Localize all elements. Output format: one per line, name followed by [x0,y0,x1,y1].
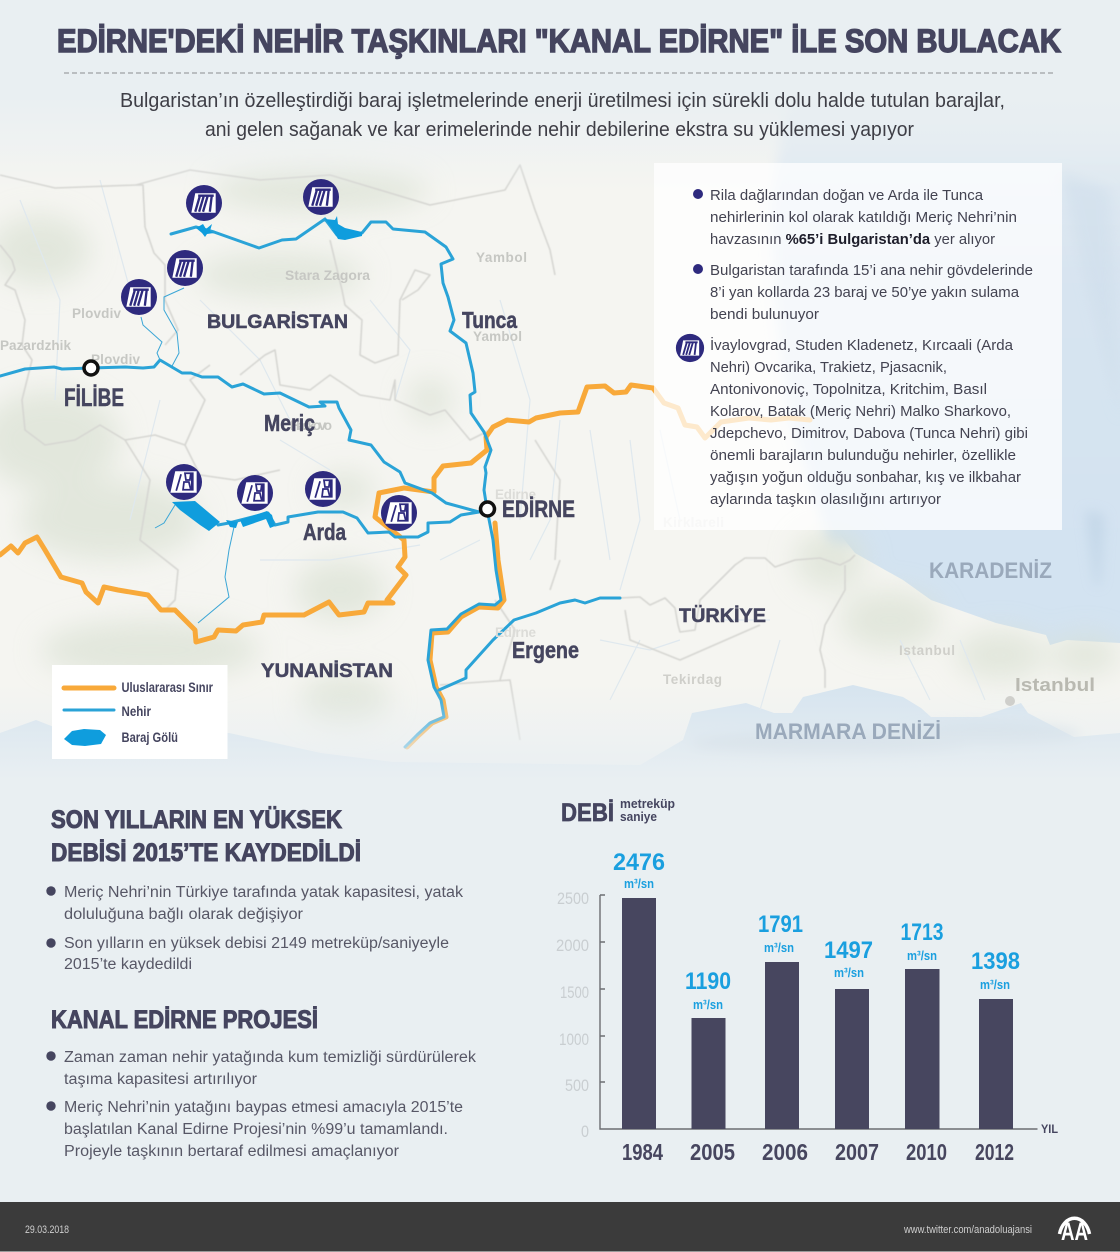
values: 1497 [824,937,873,964]
base map place names: Plovdiv [91,352,140,367]
heading: en yüksek debi [51,805,361,867]
map labels: Meriç [264,410,315,436]
axes [600,895,1038,1129]
legend: dam lake: Baraj Gölü [122,729,178,745]
values: 1190 [685,968,731,995]
icon: dam legend [676,334,704,362]
logo: AA: AA [1061,1218,1088,1246]
bullet 1: havzasının %65’i Bulgaristan’da yer alıyor [710,231,995,248]
values [613,849,1020,995]
text block: en yüksek debi: doluluğuna bağlı olarak değişiyor [64,906,303,923]
text block: Kanal Edirne: Projeyle taşkının bertaraf edilmesi amaçlanıyor [64,1143,399,1160]
legend: river: Nehir [122,703,151,719]
heading: en yüksek debi: DEBİSİ 2015’TE KAYDEDİLDİ [51,839,361,867]
sea: Karadeniz coast [835,528,1120,645]
text block: Kanal Edirne: başlatılan Kanal Edirne Projesi’nin %99’u tamamlandı. [64,1121,448,1138]
text block: Kanal Edirne: Zaman zaman nehir yatağında kum temizliği sürdürülerek [64,1049,476,1066]
map labels: FİLİBE [64,384,124,412]
base map place names: Edirne [495,487,536,502]
heading: en yüksek debi: SON YILLARIN EN YÜKSEK [51,805,342,834]
fade bottom [0,685,1120,790]
y axis labels: 500 [565,1076,589,1095]
years: 2012 [975,1139,1014,1165]
subtitle: ani gelen sağanak ve kar erimelerinde nehir debilerine ekstra su yüklemesi yapıyor [205,119,914,141]
fade top [0,0,1120,190]
river: Meriç [0,360,501,747]
subtitle: Bulgaristan’ın özelleştirdiği baraj işletmelerinde enerji üretilmesi için sürekli dolu halde tutulan barajlar, [120,90,1005,112]
text block: Kanal Edirne: Meriç Nehri’nin yatağını baypas etmesi amacıyla 2015’te [64,1099,463,1116]
dam lakes [172,216,362,531]
units [624,876,1010,1012]
twitter address: www.twitter.com/anadoluajansi [903,1224,1032,1236]
base map place names: Haskovo [290,418,332,433]
dam list: Antonivonoviç, Topolnitza, Kritchim, Basıl [710,381,987,398]
map labels: Tunca [462,307,517,333]
marker: Filibe [84,361,98,375]
panel: info box [654,163,1062,530]
text block: en yüksek debi: Meriç Nehri’nin Türkiye tarafında yatak kapasitesi, yatak [64,884,463,901]
terrain patches [0,168,1120,725]
values: 2476 [613,849,665,876]
light streams [20,180,985,710]
divider dashed line [64,72,1054,74]
units: m³/sn [834,965,864,980]
units: m³/sn [624,876,654,891]
map labels: Arda [303,519,346,545]
river: Tributaries [141,288,234,623]
legend: international border: Uluslararası Sınır [122,679,213,695]
marker: Edirne [480,502,494,516]
x axis label: YIL [1041,1122,1058,1136]
legend: river [64,703,151,719]
units: m³/sn [980,977,1010,992]
bullet 1: nehirlerinin kol olarak katıldığı Meriç Nehri’nin [710,209,1017,226]
heading: DEBİ: metreküp [620,797,675,811]
administrative borders [0,165,855,740]
sea labels: MARMARA DENİZİ [755,719,941,744]
heading: DEBİ: saniye [620,810,657,824]
base map place names: Kirklareli [663,515,724,530]
map base [0,90,1120,790]
river: Arda [218,512,479,537]
dam list: aylarında taşkın olasılığını artırıyor [710,491,941,508]
sea labels [755,558,1052,744]
rivers and borders [0,216,810,747]
text block: en yüksek debi [46,884,463,973]
base map place names: Yambol [473,329,522,344]
bullet 1 [693,187,1017,248]
dam list: yağışın yoğun olduğu sonbahar, kış ve ilkbahar [710,469,1021,486]
date: 29.03.2018 [25,1224,69,1236]
units: m³/sn [764,940,794,955]
text block: en yüksek debi: Son yılların en yüksek debisi 2149 metreküp/saniyeyle [64,935,449,952]
base map place names: Pazardzhik [0,338,71,353]
marker: İstanbul dot [1005,696,1015,706]
base map place names: Edirne [495,625,536,640]
y axis labels: 1500 [560,983,589,1002]
years: 2006 [762,1139,808,1165]
bar chart [556,849,1058,1165]
values: 1713 [900,919,944,946]
bullet 2: Bulgaristan tarafında 15’i ana nehir gövdelerinde [710,262,1033,279]
values: 1398 [971,948,1020,975]
base map place names [0,250,955,687]
river: Tunca [171,219,491,509]
legend [52,665,228,759]
base map place names: Tekirdag [663,672,722,687]
sea labels: KARADENİZ [929,558,1052,583]
clouds over sea [690,170,1120,757]
map labels: TÜRKİYE [679,606,766,627]
years: 2010 [906,1139,947,1165]
text block: Kanal Edirne [46,1049,476,1160]
dam list: Kolarov, Batak (Meriç Nehri) Malko Sharkovo, [710,403,1011,420]
bullet 2: bendi bulunuyor [710,306,819,323]
values: 1791 [758,911,803,938]
river: Ergene [439,598,620,690]
legend: dam lake [64,729,178,746]
sea: Karadeniz upper [770,90,1120,545]
y axis labels: 1000 [559,1030,589,1049]
bullet 1: Rila dağlarından doğan ve Arda ile Tunca [710,187,984,204]
dam list: Nehri) Ovcarika, Trakietz, Pjasacnik, [710,359,947,376]
bars [622,898,1013,1129]
units: m³/sn [693,997,723,1012]
years: 1984 [622,1139,663,1165]
heading: Kanal Edirne Projesi: KANAL EDİRNE PROJESİ [51,1006,318,1034]
text block: Kanal Edirne: taşıma kapasitesi artırılıyor [64,1071,257,1088]
dam icons on map [121,179,417,531]
dam list: önemli barajların bulunduğu nehirler, özellikle [710,447,1016,464]
border east section [653,388,810,438]
map labels: Ergene [512,637,579,663]
years [622,1139,1014,1165]
subtitle [120,90,1005,141]
years: 2005 [690,1139,735,1165]
y axis labels: 2000 [556,936,589,955]
label: İstanbul: Istanbul [1015,675,1095,695]
international border [0,385,653,642]
base map place names: Stara Zagora [285,268,371,283]
dam list: Jdepchevo, Dimitrov, Dabova (Tunca Nehri) gibi [710,425,1028,442]
base map place names: Yambol [476,250,527,265]
dam list: İvaylovgrad, Studen Kladenetz, Kırcaali (Arda [710,336,1014,354]
units: m³/sn [907,948,937,963]
map labels [64,307,766,682]
heading: DEBİ [561,797,675,827]
y axis labels: 2500 [557,889,589,908]
heading: DEBİ: DEBİ [561,799,614,827]
years: 2007 [835,1139,879,1165]
base map place names: Istanbul [899,643,955,658]
map labels: BULGARİSTAN [207,312,348,333]
y axis labels: 0 [581,1122,589,1141]
base map place names: Plovdiv [72,306,121,321]
bullet 2: 8’i yan kollarda 23 baraj ve 50’ye yakın sulama [710,284,1020,301]
map labels: EDİRNE [502,496,575,523]
footer [0,1202,1120,1252]
y axis labels [556,889,589,1141]
dam list [710,336,1028,508]
border along river south [407,523,504,747]
map labels: YUNANİSTAN [261,661,393,682]
sea: Marmara and Aegean [0,685,1120,790]
bullet 2 [693,262,1033,323]
text block: en yüksek debi: 2015’te kaydedildi [64,956,192,973]
